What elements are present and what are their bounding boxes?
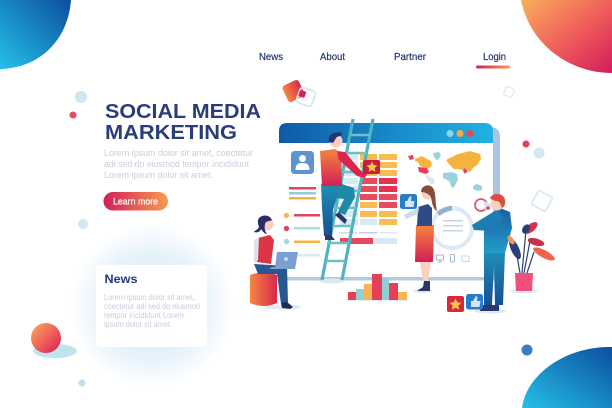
corner blob: top left [0, 0, 71, 69]
floor tiles [447, 294, 483, 312]
news text [104, 292, 200, 329]
hair [490, 194, 505, 208]
person: man with megaphone [472, 194, 512, 314]
donut chart [432, 208, 472, 248]
nav item: About: About [320, 52, 345, 63]
news text: coectetur adi sed do eiusmod [104, 301, 200, 311]
news text: ipsum dolor sit amet. [104, 319, 172, 329]
like tile [466, 294, 483, 310]
device icons [436, 254, 469, 262]
button: learn more [104, 192, 168, 210]
browser window [279, 123, 500, 280]
shoes [417, 281, 430, 291]
hair [421, 185, 437, 211]
seat cylinder [250, 272, 277, 306]
title [105, 101, 261, 144]
news glow [70, 224, 234, 388]
arm [337, 151, 367, 178]
profile lines [289, 187, 316, 200]
bar chart [347, 274, 408, 301]
arm [472, 209, 504, 231]
navigation [259, 52, 510, 68]
button: learn more: Learn more [113, 196, 158, 206]
top [417, 204, 432, 226]
window back panel [300, 127, 500, 280]
hair [329, 132, 342, 143]
panel: news card [96, 265, 207, 347]
shoes [335, 212, 347, 224]
back leg [322, 184, 355, 215]
torso [257, 235, 274, 264]
news text: tempor incididunt Lorem [104, 310, 184, 320]
nav item: News: News [259, 52, 283, 63]
laptop [269, 252, 298, 269]
front leg [321, 184, 339, 236]
large outline square [531, 190, 553, 212]
stems [516, 230, 534, 273]
pot [515, 273, 533, 291]
person: seated woman with laptop [250, 216, 302, 310]
head [330, 134, 342, 148]
head [422, 186, 434, 200]
legs [254, 264, 288, 304]
head [490, 198, 504, 210]
person: man on ladder [320, 132, 367, 240]
corner blob: bottom right [522, 347, 612, 408]
intro text: adi sed do eiusmod tempor incididunt [104, 159, 249, 170]
like tile held [400, 194, 417, 209]
list rows [284, 213, 320, 256]
star tile [447, 296, 464, 312]
legs [484, 252, 505, 305]
arm [404, 207, 419, 219]
world map [408, 151, 482, 191]
window title bar [279, 123, 493, 143]
shoes [480, 305, 499, 311]
nav item: Partner: Partner [394, 52, 427, 63]
torso [484, 208, 512, 253]
hair [254, 216, 272, 234]
intro text [104, 148, 253, 181]
nav active underline [476, 66, 510, 68]
skirt [415, 225, 434, 262]
leaves [522, 220, 540, 236]
window buttons [446, 130, 474, 137]
ladder [319, 119, 373, 284]
title: MARKETING [105, 122, 237, 144]
intro text: Lorem ipsum dolor sit amet. [104, 170, 213, 181]
torso [320, 149, 342, 186]
small outline square [503, 86, 515, 98]
sphere with shadow [31, 323, 77, 358]
legs [420, 262, 431, 281]
news text: Lorem ipsum dolor sit amet, [104, 292, 195, 302]
head [260, 218, 274, 230]
potted plant [506, 220, 556, 294]
window body [279, 140, 493, 280]
intro text: Lorem ipsum dolor sit amet, coectetur [104, 148, 253, 159]
megaphone [475, 199, 491, 211]
title: SOCIAL MEDIA [105, 101, 261, 123]
icon: overlapping squares [282, 79, 316, 107]
person: standing woman [404, 185, 437, 293]
profile tile [291, 151, 314, 174]
data table [339, 154, 397, 244]
corner blob: top right [521, 0, 612, 73]
star tile on table [363, 160, 380, 174]
news heading: News [104, 272, 138, 286]
nav item: Login: Login [483, 52, 506, 63]
decorative floating shapes [70, 79, 553, 386]
